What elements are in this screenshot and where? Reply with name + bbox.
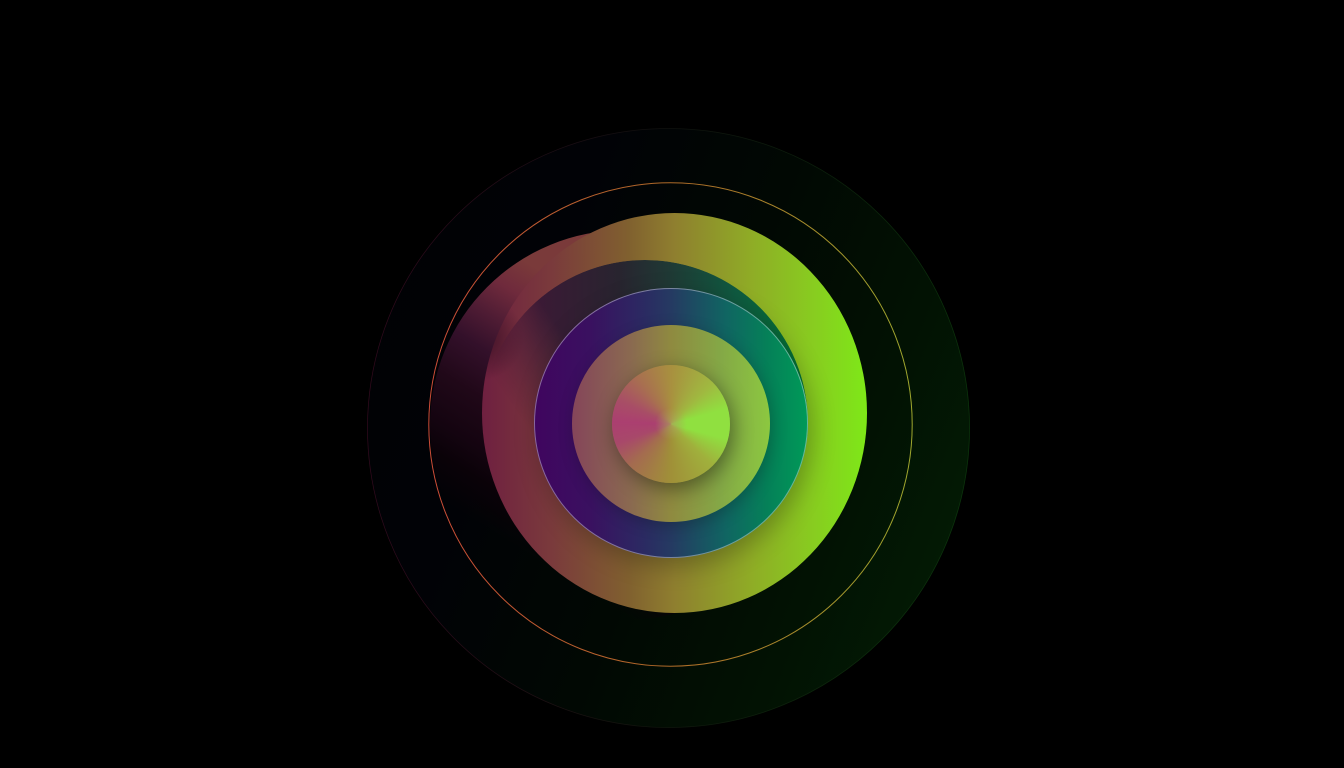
dark teal overlapping circle (508, 260, 808, 436)
outer dark disc (367, 128, 970, 728)
big gradient ring (482, 212, 867, 612)
left crescent (430, 230, 820, 620)
olive to green ring (572, 325, 770, 522)
purple to green ring (534, 288, 808, 558)
center disc (612, 365, 730, 483)
